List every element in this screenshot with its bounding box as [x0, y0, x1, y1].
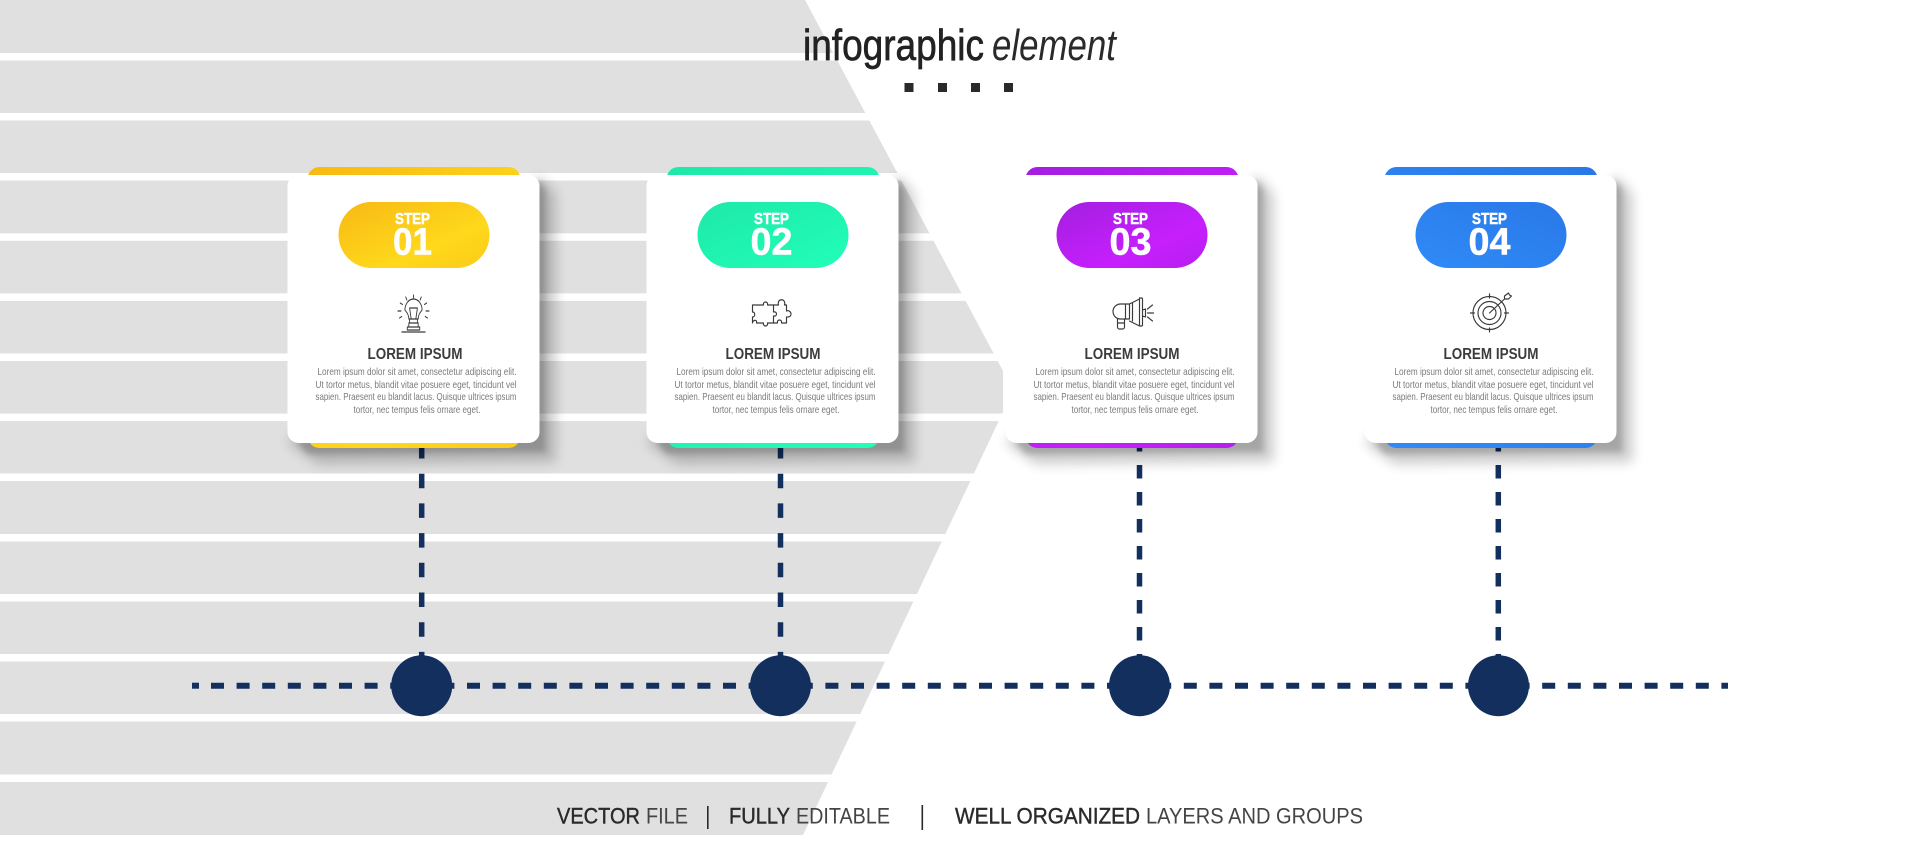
panel: step 03 — [1006, 167, 1274, 464]
body text: tortor, nec tempus felis ornare eget. — [1430, 404, 1558, 416]
body text: Lorem ipsum dolor sit amet, consectetur adipiscing elit. — [318, 366, 516, 378]
footer caption: WELL ORGANIZED — [955, 804, 1140, 828]
title — [803, 21, 1117, 70]
footer caption — [557, 804, 1363, 830]
footer caption: LAYERS AND GROUPS — [1146, 804, 1363, 828]
icon: puzzle — [752, 300, 791, 326]
body text: Ut tortor metus, blandit vitae posuere eget, tincidunt vel — [316, 379, 516, 391]
body text: sapien. Praesent eu blandit lacus. Quisque ultrices ipsum — [674, 391, 876, 403]
title: element — [992, 21, 1117, 70]
body text — [1392, 366, 1594, 416]
body text: tortor, nec tempus felis ornare eget. — [354, 404, 480, 416]
timeline node 4 — [1468, 655, 1529, 716]
footer caption: EDITABLE — [796, 804, 890, 828]
body text: Ut tortor metus, blandit vitae posuere eget, tincidunt vel — [1392, 379, 1594, 391]
step label: 04 — [1468, 222, 1510, 264]
body text: Lorem ipsum dolor sit amet, consectetur adipiscing elit. — [1394, 366, 1594, 378]
icon: target — [1470, 293, 1512, 332]
body text: Lorem ipsum dolor sit amet, consectetur adipiscing elit. — [1036, 366, 1234, 378]
vertical connector 3 — [1137, 438, 1142, 660]
heading: LOREM IPSUM — [1444, 346, 1538, 363]
heading: LOREM IPSUM — [368, 346, 462, 363]
panel: step 02 — [646, 167, 914, 464]
body text — [674, 366, 876, 416]
body text: Lorem ipsum dolor sit amet, consectetur adipiscing elit. — [676, 366, 876, 378]
vertical connector 4 — [1496, 438, 1501, 660]
footer caption: FILE — [646, 804, 688, 828]
panel: step 01 — [288, 167, 556, 464]
horizontal timeline — [192, 683, 1728, 689]
timeline node 3 — [1109, 655, 1170, 716]
step label: STEP — [1472, 211, 1507, 228]
heading: LOREM IPSUM — [1084, 346, 1180, 363]
panel: step 04 — [1364, 167, 1632, 464]
body text: sapien. Praesent eu blandit lacus. Quisque ultrices ipsum — [1034, 391, 1235, 403]
body text — [1034, 366, 1235, 416]
body text: tortor, nec tempus felis ornare eget. — [712, 404, 840, 416]
timeline node 2 — [750, 655, 811, 716]
step label: STEP — [1113, 211, 1148, 228]
body text: sapien. Praesent eu blandit lacus. Quisque ultrices ipsum — [1392, 391, 1594, 403]
vertical connector 1 — [419, 444, 424, 660]
title dots — [904, 83, 1013, 92]
title: infographic — [803, 21, 984, 70]
body text: sapien. Praesent eu blandit lacus. Quisque ultrices ipsum — [316, 391, 517, 403]
background striped grey shape — [0, 0, 1100, 835]
body text: Ut tortor metus, blandit vitae posuere eget, tincidunt vel — [1034, 379, 1234, 391]
step label: STEP — [754, 211, 789, 228]
footer caption: VECTOR — [557, 804, 640, 828]
heading: LOREM IPSUM — [726, 346, 820, 363]
vertical connector 2 — [778, 444, 783, 660]
step label: 03 — [1110, 222, 1152, 264]
timeline node 1 — [391, 655, 452, 716]
icon: megaphone — [1113, 298, 1154, 329]
step label: 02 — [750, 222, 792, 264]
step label: STEP — [395, 211, 430, 228]
body text: tortor, nec tempus felis ornare eget. — [1072, 404, 1198, 416]
step label: 01 — [393, 222, 432, 264]
icon: light bulb — [398, 295, 429, 332]
body text: Ut tortor metus, blandit vitae posuere eget, tincidunt vel — [674, 379, 876, 391]
body text — [316, 366, 517, 416]
footer caption: FULLY — [729, 804, 790, 828]
